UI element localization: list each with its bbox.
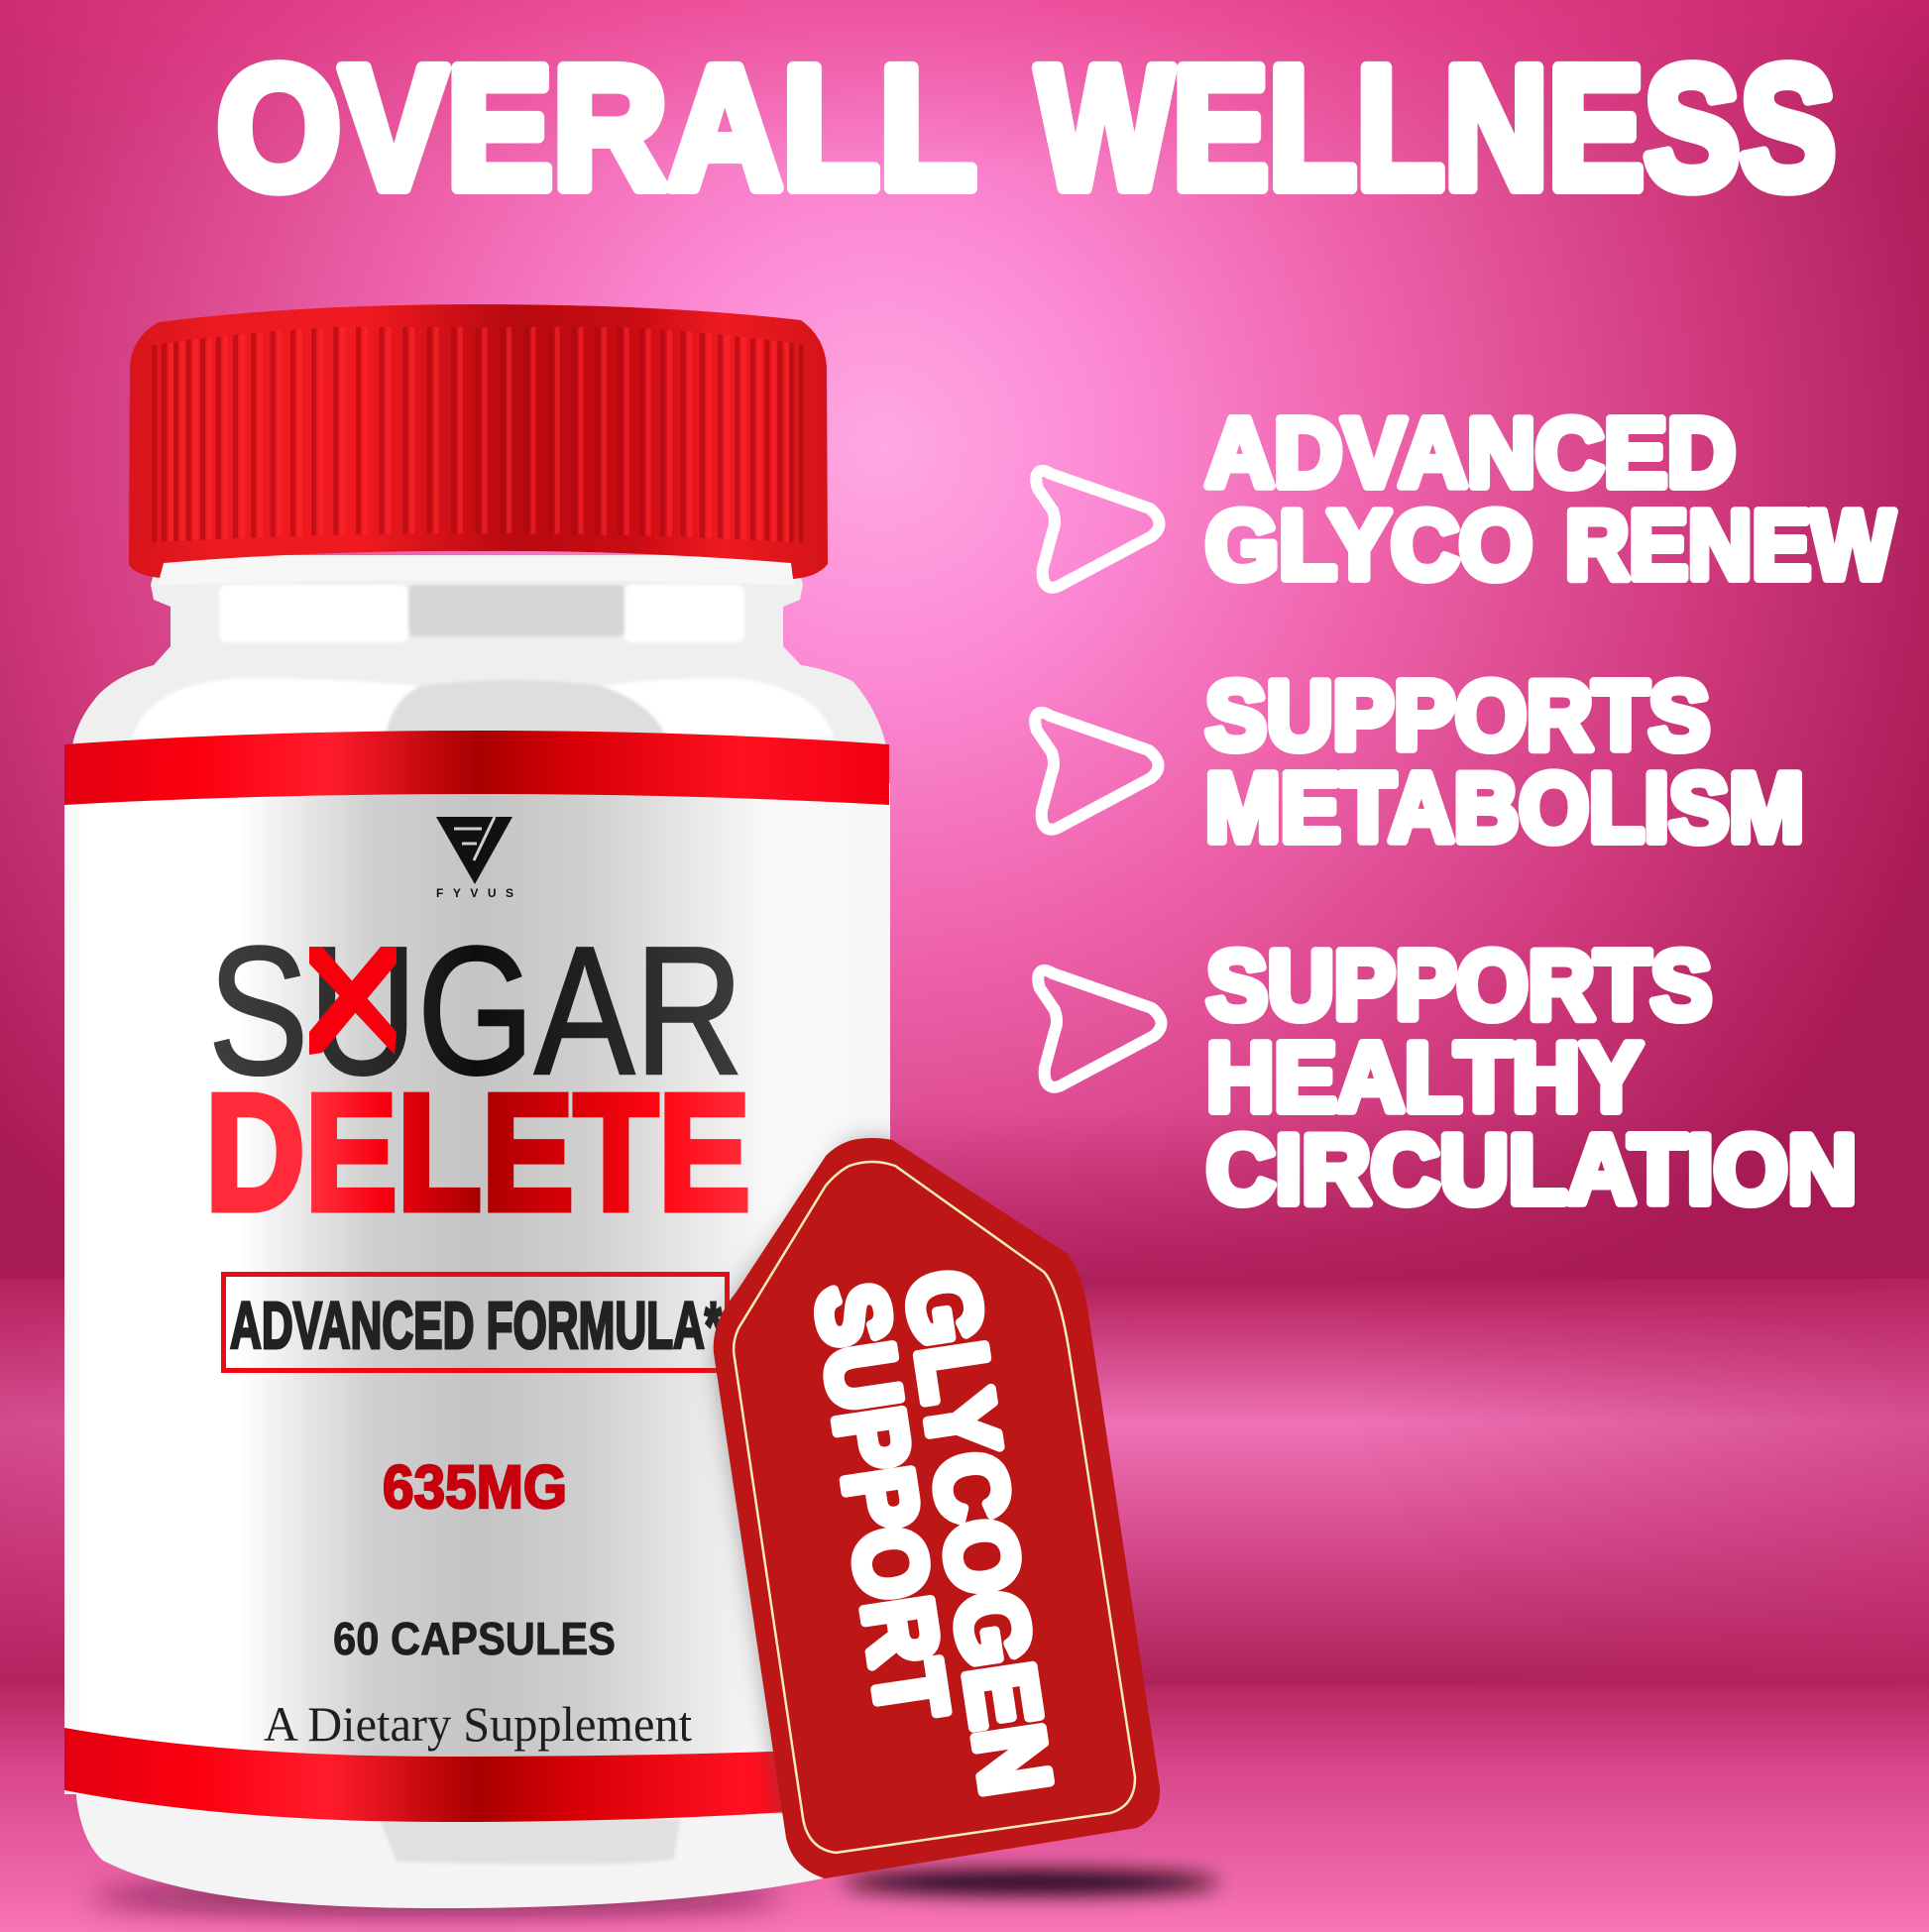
benefit text: GLYCO [1205,490,1532,599]
arrow icon [1036,471,1160,588]
tag shadow on bottle [702,1126,890,1814]
benefit text: SUPPORTS [1205,660,1710,769]
dosage: 635MG [383,1453,567,1521]
benefit text: RENEW [1565,490,1894,599]
red cross over the U [309,947,397,1055]
benefit text [1206,930,1857,1223]
product bottle [64,304,890,1908]
benefit text: SUPPORTS [1206,930,1712,1039]
label body [64,783,890,1794]
bottle shadow on floor [89,1871,1219,1913]
top red band [64,731,889,805]
brand logo: FYVUS [436,886,513,900]
neck thread ring [159,557,795,585]
product name: SUGAR: SUGAR [208,908,743,1112]
benefit text: ADVANCED [1205,398,1736,508]
bottle base [75,1784,823,1908]
neck highlights [219,585,744,642]
base panel [380,1819,680,1865]
bottle cap [129,304,828,579]
tag text [795,1264,1073,1801]
glycogen support tag [714,1138,1160,1878]
brand logo [436,817,513,900]
tag shape [714,1138,1160,1878]
bottom red band [64,1728,890,1822]
tag stitched line [734,1162,1135,1853]
benefit 1 [1036,398,1894,599]
benefit 2 [1035,660,1804,862]
arrow icon [1035,713,1159,830]
benefit 3 [1038,930,1857,1223]
benefit text: METABOLISM [1205,753,1804,862]
title [217,32,1836,226]
benefit text: HEALTHY [1206,1023,1643,1132]
dietary supplement line: A Dietary Supplement [264,1696,692,1752]
tag text: SUPPORT [795,1277,968,1726]
shoulder highlights [132,678,835,739]
arrow icon [1038,970,1162,1087]
capsule count: 60 CAPSULES [333,1613,616,1664]
advanced formula box [224,1275,728,1370]
benefit text: CIRCULATION [1206,1114,1857,1223]
benefit text [1205,660,1804,862]
title: OVERALL [217,32,976,226]
bottle shoulder and neck [72,555,886,745]
benefit text [1205,398,1894,599]
tag text: GLYCOGEN [885,1264,1073,1801]
advanced formula box: ADVANCED FORMULA* [230,1289,723,1363]
product name: DELETE: DELETE [205,1061,750,1245]
